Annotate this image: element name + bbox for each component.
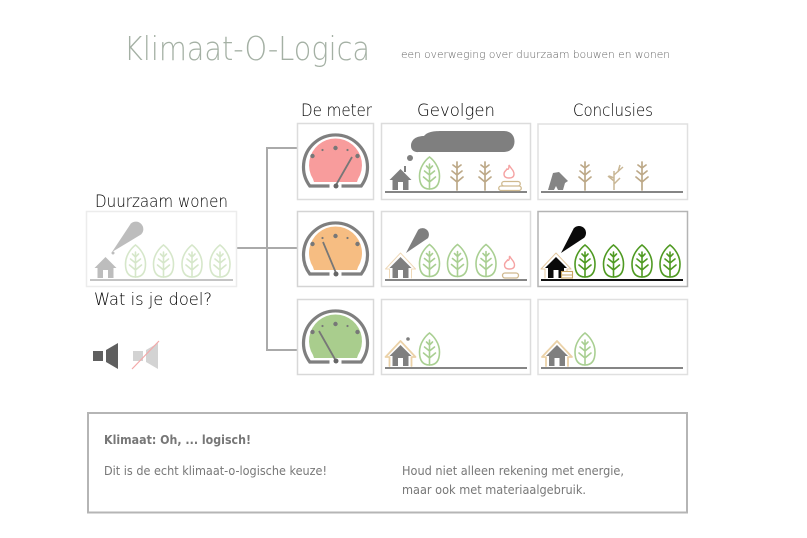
title: Klimaat-O-Logica xyxy=(124,29,370,68)
panel: explanation xyxy=(88,413,687,512)
smoke cloud xyxy=(411,131,514,152)
heading: Gevolgen: Gevolgen xyxy=(417,101,495,121)
panel: conclusion best xyxy=(538,212,688,286)
connector lines xyxy=(237,148,297,350)
explanation right text: Houd niet alleen rekening met energie, xyxy=(402,464,624,478)
panel: meter red xyxy=(298,124,374,200)
question: Wat is je doel?: Wat is je doel? xyxy=(94,290,212,310)
panel: goal xyxy=(86,212,236,286)
heading: De meter: De meter xyxy=(301,101,372,121)
icon: speaker on xyxy=(93,343,118,369)
explanation right text line 2: maar ook met materiaalgebruik. xyxy=(402,483,586,497)
icon: speaker muted xyxy=(132,341,159,369)
panel: meter orange xyxy=(298,212,374,286)
explanation left text: Dit is de echt klimaat-o-logische keuze! xyxy=(104,464,327,478)
panel: consequences low xyxy=(382,300,530,374)
panel: consequences medium xyxy=(382,212,530,286)
panel: consequences high xyxy=(382,124,530,200)
explanation heading: Klimaat: Oh, ... logisch! xyxy=(104,433,251,447)
heading: Duurzaam wonen: Duurzaam wonen xyxy=(95,192,228,212)
heading: Conclusies: Conclusies xyxy=(573,101,653,121)
subtitle: een overweging over duurzaam bouwen en wonen xyxy=(401,48,670,61)
panel: conclusion high xyxy=(538,124,688,200)
panel: conclusion low xyxy=(538,300,688,374)
panel: meter green xyxy=(298,300,374,374)
